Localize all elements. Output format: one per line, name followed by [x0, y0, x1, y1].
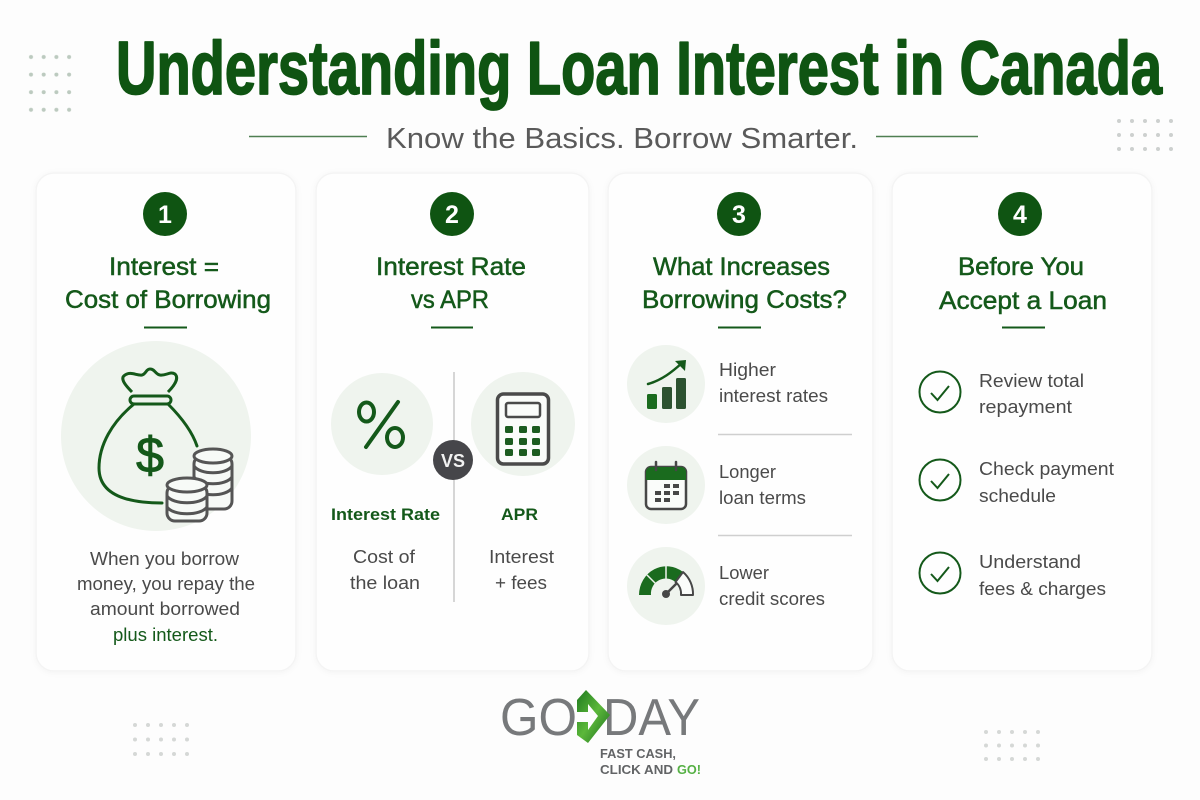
panel: before you accept a loan [892, 173, 1152, 671]
subtitle: Know the Basics. Borrow Smarter. [386, 123, 858, 155]
check item: check payment schedule [920, 459, 1114, 506]
comparison labels: Cost of [353, 547, 416, 567]
vs badge [433, 440, 473, 480]
heading: What Increases [653, 253, 830, 281]
item text: higher interest rates: interest rates [719, 386, 828, 406]
icon: credit score gauge [627, 547, 705, 625]
icon: calendar [627, 446, 705, 524]
item text: lower credit scores [719, 563, 825, 609]
logo: GoDay: GO! [677, 762, 701, 777]
heading: Borrowing Costs? [642, 286, 847, 314]
step number 1: 1 [158, 201, 172, 229]
icon: green arrow [577, 690, 610, 743]
description: amount borrowed [90, 599, 240, 619]
heading [65, 253, 271, 328]
icon: calculator [471, 372, 575, 476]
logo: GoDay: GO [500, 689, 577, 747]
heading: Before You [958, 253, 1084, 281]
step number 1 [143, 192, 187, 236]
item text: longer loan terms [719, 462, 806, 508]
check item: review total repayment: repayment [979, 397, 1072, 417]
icon: percent [331, 373, 433, 475]
comparison labels: + fees [495, 573, 547, 593]
logo: GoDay: FAST CASH, [600, 746, 676, 761]
step number 2 [430, 192, 474, 236]
logo: GoDay: DAY [603, 689, 700, 747]
heading: Interest = [109, 253, 219, 281]
check item: review total repayment: Review total [979, 371, 1084, 391]
coins [167, 449, 232, 521]
panel: interest rate vs APR [316, 173, 589, 671]
item text: longer loan terms: Longer [719, 462, 776, 482]
heading: Accept a Loan [939, 287, 1107, 315]
heading [642, 253, 847, 328]
check item: check payment schedule: Check payment [979, 459, 1114, 479]
icon: money bag with coins: $ [136, 427, 164, 483]
logo: GoDay: CLICK AND [600, 762, 673, 777]
description: plus interest. [113, 625, 218, 645]
description: When you borrow [90, 549, 240, 569]
check item: review total repayment [920, 371, 1084, 417]
heading [376, 253, 526, 328]
step number 3: 3 [732, 201, 746, 229]
icon: money bag with coins [61, 341, 251, 531]
comparison labels: Interest Rate [331, 505, 440, 524]
item text: lower credit scores: Lower [719, 563, 769, 583]
vs badge: VS [441, 451, 465, 471]
icon: rising bar chart [627, 345, 705, 423]
heading: vs APR [411, 286, 489, 314]
heading: Cost of Borrowing [65, 286, 271, 314]
item text: longer loan terms: loan terms [719, 488, 806, 508]
logo: GoDay [500, 689, 701, 777]
check item: check payment schedule: schedule [979, 486, 1056, 506]
description [77, 549, 255, 645]
comparison labels [331, 505, 554, 593]
step number 2: 2 [445, 201, 459, 229]
panel: interest = cost of borrowing [36, 173, 296, 671]
item text: higher interest rates: Higher [719, 360, 776, 380]
step number 3 [717, 192, 761, 236]
comparison labels: Interest [489, 547, 554, 567]
heading [939, 253, 1107, 328]
description: money, you repay the [77, 574, 255, 594]
comparison labels: APR [501, 505, 538, 524]
step number 4 [998, 192, 1042, 236]
heading: Interest Rate [376, 253, 526, 281]
comparison labels: the loan [350, 573, 420, 593]
check item: understand fees and charges: Understand [979, 552, 1081, 572]
check item: understand fees and charges [920, 552, 1106, 599]
step number 4: 4 [1013, 201, 1027, 229]
item text: lower credit scores: credit scores [719, 589, 825, 609]
panel: what increases borrowing costs [608, 173, 873, 671]
item text: higher interest rates [719, 360, 828, 406]
check item: understand fees and charges: fees & charges [979, 579, 1106, 599]
